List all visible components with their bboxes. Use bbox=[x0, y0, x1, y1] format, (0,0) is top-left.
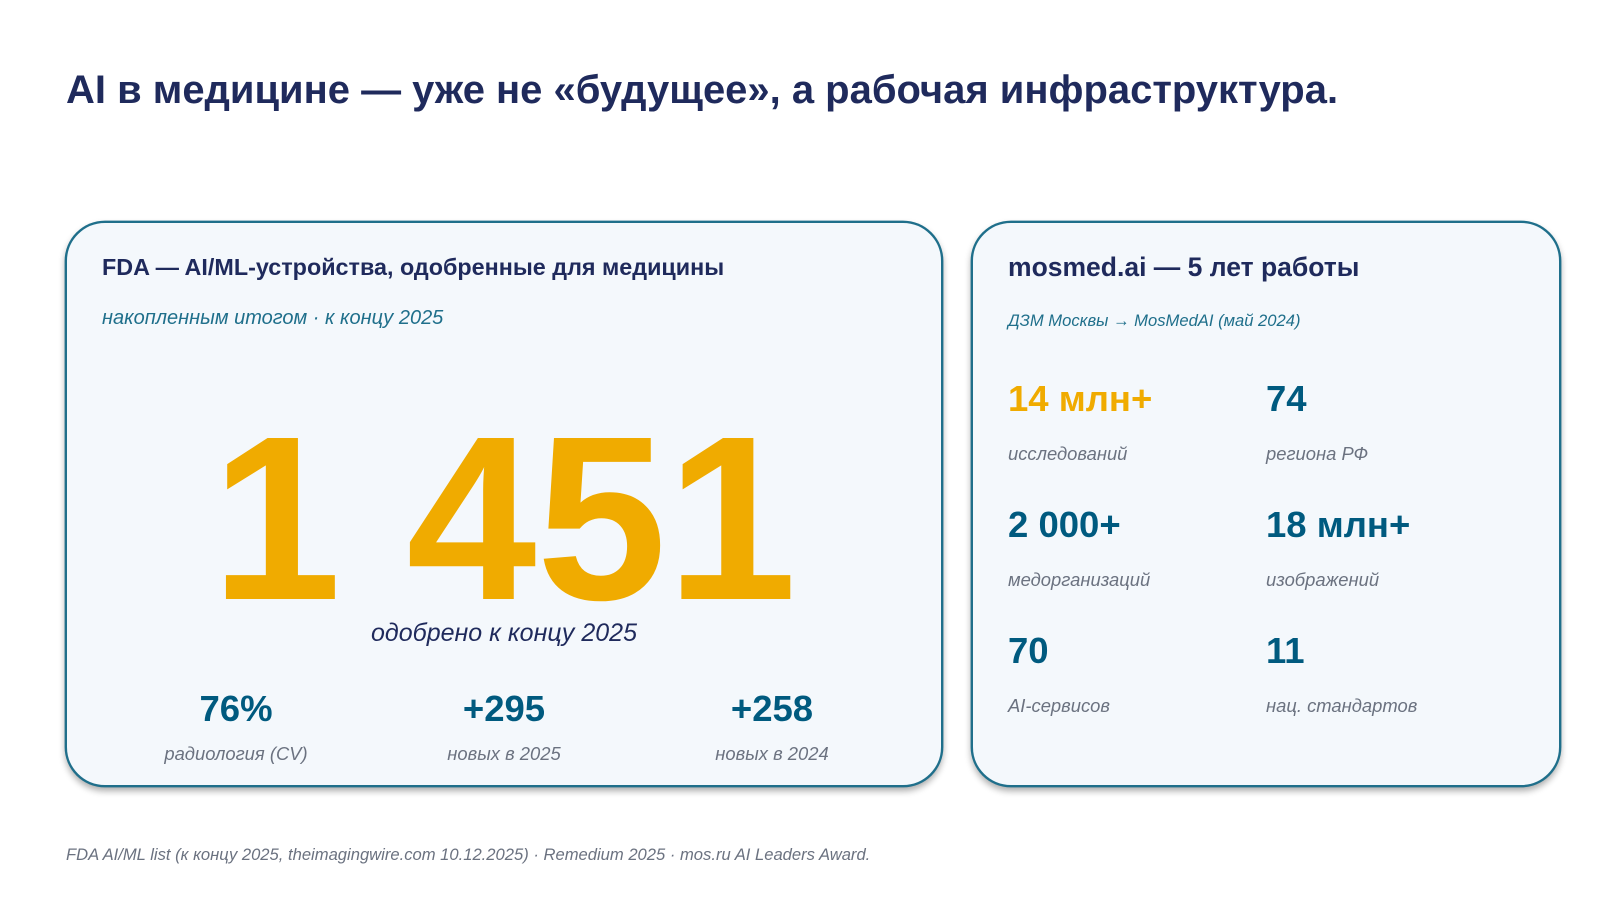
stat: +295: +295 bbox=[463, 688, 545, 729]
panel heading: FDA: FDA — AI/ML-устройства, одобренные для медицины bbox=[102, 254, 724, 280]
metric: 2 000+: 2 000+ bbox=[1008, 504, 1121, 545]
metric label: AI-сервисов: AI-сервисов bbox=[1008, 695, 1110, 716]
metric: 11: 11 bbox=[1266, 630, 1305, 671]
big number: 1 451 bbox=[211, 387, 797, 649]
metric: 14 млн+: 14 млн+ bbox=[1008, 378, 1152, 419]
metric label: нац. стандартов: нац. стандартов bbox=[1266, 695, 1417, 716]
stat label: radiology: радиология (CV) bbox=[164, 743, 308, 764]
stat label: new in 2024: новых в 2024 bbox=[715, 743, 829, 764]
panel: mosmed.ai bbox=[967, 220, 1565, 795]
panel background: mosmed.ai bbox=[971, 221, 1560, 786]
panel heading: mosmed.ai: mosmed.ai — 5 лет работы bbox=[1008, 252, 1359, 282]
panel subtitle: FDA: накопленным итогом · к концу 2025 bbox=[102, 307, 443, 329]
metric label: региона РФ: региона РФ bbox=[1266, 443, 1368, 464]
footer sources: FDA AI/ML list (к концу 2025, theimagingwire.com 10.12.2025) · Remedium 2025 · mos.ru AI Leaders Award. bbox=[66, 844, 870, 864]
title: AI в медицине — уже не «будущее», а рабочая инфраструктура. bbox=[66, 68, 1338, 112]
metric: 70: 70 bbox=[1008, 630, 1049, 671]
metric: 18 млн+: 18 млн+ bbox=[1266, 504, 1410, 545]
panel: FDA bbox=[61, 220, 947, 795]
metric: 74: 74 bbox=[1266, 378, 1307, 419]
metric label: изображений: изображений bbox=[1266, 569, 1379, 590]
metric label: исследований: исследований bbox=[1008, 443, 1127, 464]
big number caption: одобрено к концу 2025 bbox=[371, 619, 637, 647]
metric label: медорганизаций: медорганизаций bbox=[1008, 569, 1150, 590]
stat: +258: +258 bbox=[731, 688, 813, 729]
stat label: new in 2025: новых в 2025 bbox=[447, 743, 561, 764]
panel background: FDA bbox=[65, 221, 942, 786]
stat: 76%: 76% bbox=[199, 688, 273, 729]
panel subtitle: mosmed.ai: ДЗМ Москвы → MosMedAI (май 2024) bbox=[1008, 311, 1300, 330]
